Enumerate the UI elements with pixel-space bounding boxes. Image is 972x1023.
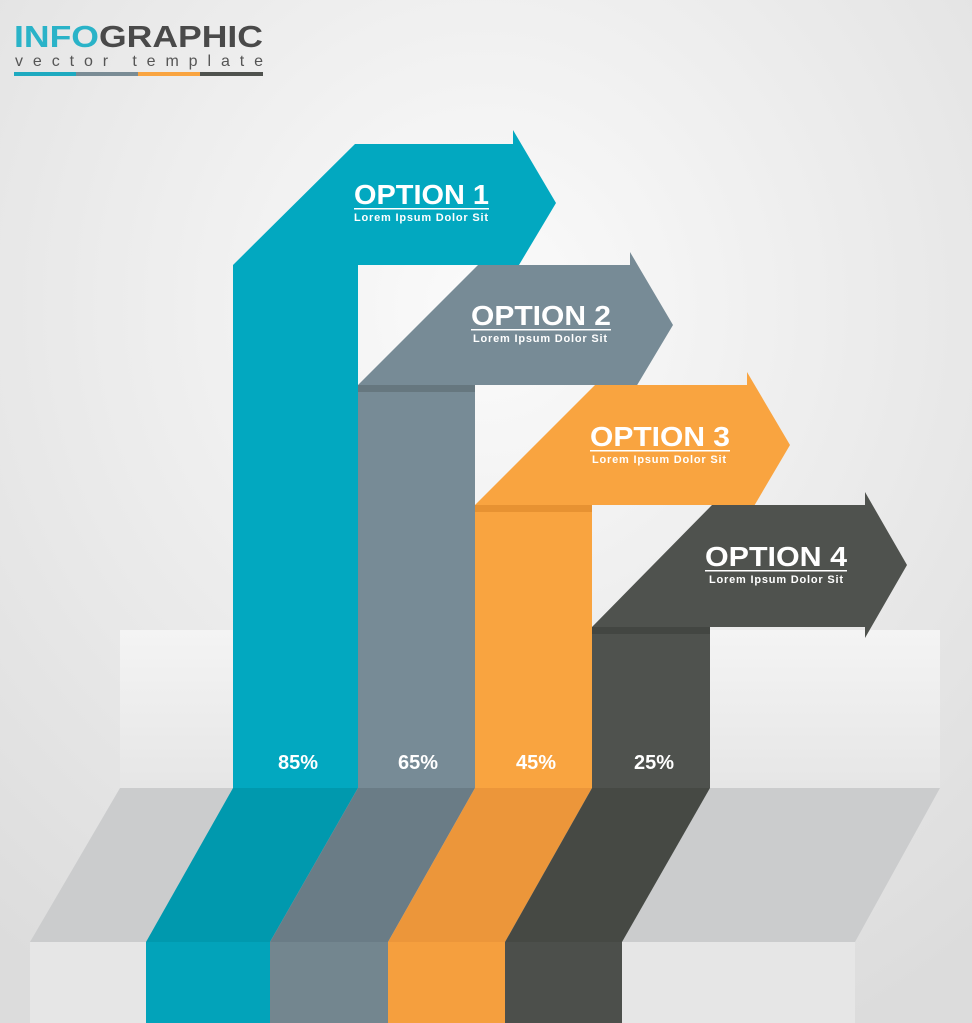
bar: option 1 (teal) [146, 130, 556, 1023]
back wall [120, 630, 940, 788]
title [14, 19, 263, 76]
title: vector template [15, 53, 263, 70]
bar: option 1 (teal): Lorem Ipsum Dolor Sit [354, 212, 488, 224]
bar: option 2 (gray): 65% [398, 752, 438, 774]
bar: option 4 (dark): 25% [634, 752, 674, 774]
shelf slanted top [30, 788, 940, 942]
bar: option 3 (orange): OPTION 3 [590, 421, 730, 452]
bar: option 3 (orange): 45% [516, 752, 556, 774]
bar: option 4 (dark): Lorem Ipsum Dolor Sit [709, 574, 843, 586]
bar: option 2 (gray) [270, 252, 673, 1023]
bar: option 1 (teal): 85% [278, 752, 318, 774]
bar: option 3 (orange) [388, 372, 790, 1023]
bar: option 4 (dark): OPTION 4 [705, 541, 847, 572]
shelf front [30, 942, 855, 1023]
bar: option 2 (gray): Lorem Ipsum Dolor Sit [473, 333, 607, 345]
title: INFO GRAPHIC [14, 19, 263, 54]
bar: option 3 (orange): Lorem Ipsum Dolor Sit [592, 454, 726, 466]
bar: option 4 (dark) [505, 492, 907, 1023]
bar: option 2 (gray): OPTION 2 [471, 300, 611, 331]
bar: option 1 (teal): OPTION 1 [354, 179, 489, 210]
